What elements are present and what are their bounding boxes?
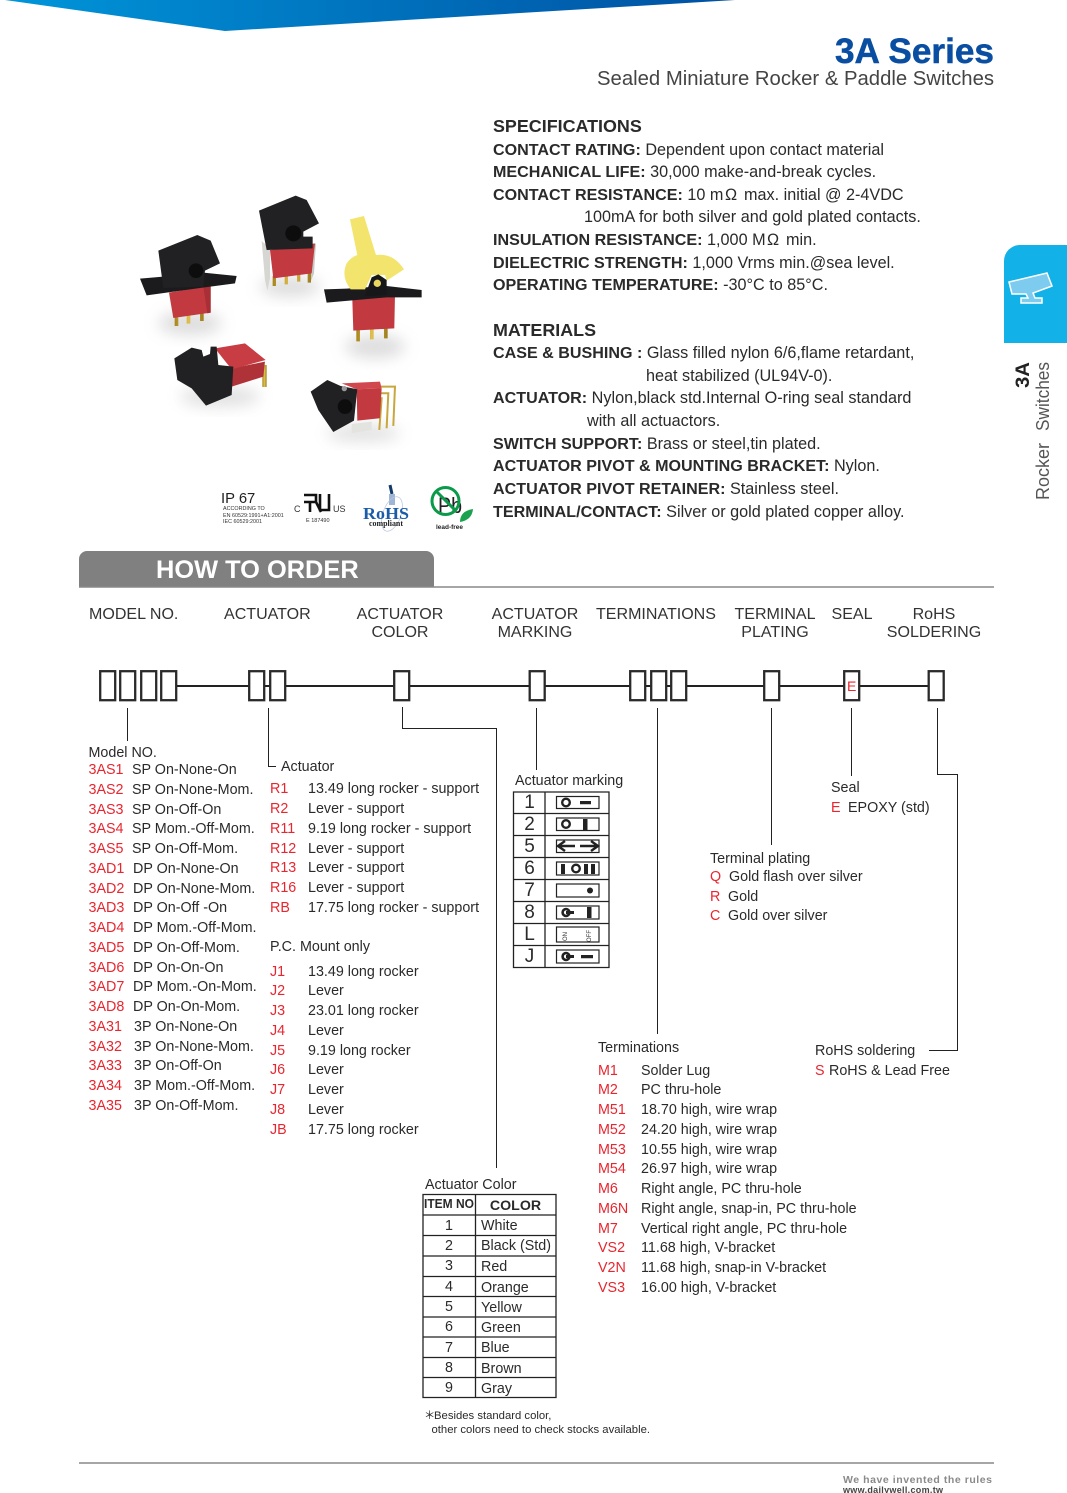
model number list: 3AD7 [88, 979, 124, 995]
rohs soldering: RoHS & Lead Free [829, 1063, 950, 1079]
footnote: Besides standard color, [434, 1410, 551, 1422]
model number list: SP On-None-On [132, 762, 237, 778]
terminal plating: Gold over silver [728, 908, 828, 924]
actuator color table: ITEM NO [424, 1197, 474, 1211]
materials: MATERIALS [493, 320, 596, 340]
terminations: 16.00 high, V-bracket [641, 1280, 776, 1296]
materials: with all actuactors. [586, 412, 720, 430]
actuator marking table: ON [563, 932, 569, 941]
terminations: M54 [598, 1161, 626, 1177]
actuator marking table: 6 [524, 858, 535, 879]
logo: IP 67: ACCORDING TO [223, 506, 265, 512]
switch 3 yellow paddle [324, 216, 422, 341]
footnote: other colors need to check stocks available. [432, 1424, 650, 1436]
actuator marking table: L [524, 924, 535, 945]
product photo: five switches [140, 196, 422, 442]
seal: Seal [831, 780, 860, 796]
logo: IP 67 [221, 491, 284, 525]
logo: IP 67: IP 67 [221, 491, 255, 507]
rohs soldering: S [815, 1063, 825, 1079]
terminations: V2N [598, 1260, 626, 1276]
terminations: Vertical right angle, PC thru-hole [641, 1221, 847, 1237]
actuator list: RB [270, 900, 290, 916]
terminations: M51 [598, 1102, 626, 1118]
model number list: 3AS3 [88, 802, 124, 818]
materials: ACTUATOR: Nylon,black std.Internal O-ring seal standard [493, 389, 911, 407]
actuator list: Lever [308, 983, 344, 999]
rohs soldering [815, 1043, 950, 1079]
materials: CASE & BUSHING : Glass filled nylon 6/6,flame retardant, [493, 344, 914, 362]
model number list: DP On-None-Mom. [133, 881, 255, 897]
actuator list: 17.75 long rocker [308, 1122, 419, 1138]
model number list: 3AD5 [88, 940, 124, 956]
side tab: Switches [1033, 362, 1053, 431]
model number list: 3A32 [88, 1039, 122, 1055]
terminal plating: Gold [728, 889, 758, 905]
actuator list: R13 [270, 860, 296, 876]
logo: lead free: Pb [438, 493, 462, 518]
terminations: PC thru-hole [641, 1082, 721, 1098]
marking icon boxes [556, 796, 599, 963]
actuator list: P.C. Mount only [270, 939, 371, 955]
switch 5 [311, 380, 395, 433]
actuator list: 9.19 long rocker [308, 1043, 411, 1059]
model number list: 3A35 [88, 1098, 122, 1114]
terminations: M52 [598, 1122, 626, 1138]
logo: IP 67: IEC 60529:2001 [223, 519, 262, 525]
column headers: PLATING [741, 623, 809, 641]
actuator list: Actuator [281, 759, 335, 775]
terminations: M7 [598, 1221, 618, 1237]
model number list: 3P On-Off-Mom. [134, 1098, 238, 1114]
model number list: 3AS4 [88, 821, 124, 837]
model number list: SP On-None-Mom. [132, 782, 253, 798]
actuator list: J4 [270, 1023, 285, 1039]
model number list: DP On-Off-Mom. [133, 940, 240, 956]
actuator list: R2 [270, 801, 288, 817]
logo: UL: US [333, 504, 346, 514]
model number list: 3AS2 [88, 782, 124, 798]
actuator color table: 9 [445, 1380, 453, 1396]
specifications: Ω [725, 186, 737, 204]
actuator list: R11 [270, 821, 295, 837]
actuator color table: 7 [445, 1340, 453, 1356]
footer: We have invented the rules [843, 1474, 992, 1486]
actuator color table: 5 [445, 1299, 453, 1315]
actuator list: Lever - support [308, 860, 404, 876]
specifications: max. initial @ 2-4VDC [744, 186, 904, 204]
actuator list: Lever - support [308, 880, 404, 896]
column headers: TERMINAL [734, 605, 816, 623]
materials: TERMINAL/CONTACT: Silver or gold plated copper alloy. [493, 503, 905, 521]
model number list: 3AS1 [88, 762, 124, 778]
seal: E [831, 800, 841, 816]
actuator color table: 4 [445, 1279, 453, 1295]
model number list: SP Mom.-Off-Mom. [132, 821, 255, 837]
footnote: ＊ [424, 1410, 435, 1422]
column headers: MODEL NO. [89, 605, 178, 623]
switch 1 [140, 235, 237, 326]
model number list: DP On-On-Mom. [133, 999, 240, 1015]
part number code boxes [100, 671, 944, 700]
how to order heading: HOW TO ORDER [156, 556, 359, 584]
specifications: min. [786, 231, 817, 249]
terminations: Right angle, PC thru-hole [641, 1181, 802, 1197]
actuator list: J3 [270, 1003, 285, 1019]
actuator list: R12 [270, 841, 296, 857]
actuator marking table: OFF [587, 930, 593, 942]
specifications: OPERATING TEMPERATURE: -30°C to 85°C. [493, 276, 828, 294]
specifications: CONTACT RESISTANCE: 10 m [493, 186, 723, 204]
model number list: 3AD3 [88, 900, 124, 916]
actuator marking table: 2 [524, 814, 535, 835]
actuator color table: 8 [445, 1360, 453, 1376]
icon: rocker switch [1009, 273, 1052, 303]
model number list: DP Mom.-On-Mom. [133, 979, 257, 995]
logo: lead free: lead-free [436, 524, 463, 531]
actuator color table: COLOR [490, 1198, 541, 1214]
actuator list: Lever [308, 1062, 344, 1078]
footnote [424, 1410, 650, 1436]
terminations: M6N [598, 1201, 628, 1217]
terminal plating: Terminal plating [710, 851, 810, 867]
actuator marking table [514, 773, 623, 968]
column headers: MARKING [498, 623, 572, 641]
terminations: VS3 [598, 1280, 625, 1296]
actuator list: R16 [270, 880, 296, 896]
actuator list [270, 759, 479, 1138]
side tab: 3A [1012, 362, 1034, 388]
column headers: ACTUATOR [224, 605, 311, 623]
terminations: 10.55 high, wire wrap [641, 1142, 777, 1158]
model number list: SP On-Off-On [132, 802, 221, 818]
actuator list: 23.01 long rocker [308, 1003, 419, 1019]
specifications: CONTACT RATING: Dependent upon contact material [493, 141, 884, 159]
model number list: Model NO. [88, 745, 157, 761]
model number list: 3AD8 [88, 999, 124, 1015]
actuator list: J5 [270, 1043, 285, 1059]
specifications: INSULATION RESISTANCE: 1,000 M [493, 231, 766, 249]
terminations: 18.70 high, wire wrap [641, 1102, 777, 1118]
specifications: Ω [767, 231, 779, 249]
actuator color table: 6 [445, 1319, 453, 1335]
actuator color table: 3 [445, 1258, 453, 1274]
model number list: 3P On-None-Mom. [134, 1039, 254, 1055]
terminations: M6 [598, 1181, 618, 1197]
specifications: SPECIFICATIONS [493, 116, 642, 136]
logo: RoHS [363, 485, 409, 534]
actuator color table: Red [481, 1259, 507, 1275]
materials [493, 320, 914, 521]
terminal plating: Q [710, 869, 721, 885]
actuator list: R1 [270, 781, 288, 797]
switch 2 [259, 196, 319, 291]
model number list: 3AD4 [88, 920, 124, 936]
logo: RoHS: compliant [369, 519, 403, 528]
model number list [88, 745, 257, 1114]
actuator marking table: J [525, 946, 534, 967]
specifications: 100mA for both silver and gold plated contacts. [584, 208, 921, 226]
actuator marking table: 7 [524, 880, 535, 901]
model number list: 3AD1 [88, 861, 124, 877]
column headers [89, 605, 981, 641]
actuator list: Lever [308, 1023, 344, 1039]
model number list: 3A31 [88, 1019, 122, 1035]
actuator list: Lever - support [308, 801, 404, 817]
actuator color table: 2 [445, 1238, 453, 1254]
terminations: M1 [598, 1063, 618, 1079]
title [597, 32, 994, 90]
actuator marking table: Actuator marking [515, 773, 623, 789]
specifications [493, 116, 921, 294]
actuator color table: Gray [481, 1381, 513, 1397]
terminal plating [710, 851, 863, 924]
actuator marking table: 1 [524, 792, 535, 813]
actuator color table: Yellow [481, 1300, 523, 1316]
actuator color table: Green [481, 1320, 521, 1336]
terminations: Terminations [598, 1040, 679, 1056]
logo: UL [294, 494, 346, 524]
actuator marking table: 8 [524, 902, 535, 923]
model number list: 3A34 [88, 1078, 122, 1094]
column headers: COLOR [371, 623, 429, 641]
model number list: 3P Mom.-Off-Mom. [134, 1078, 255, 1094]
rohs soldering: RoHS soldering [815, 1043, 915, 1059]
actuator color table [423, 1177, 556, 1398]
actuator color table: White [481, 1218, 518, 1234]
actuator marking table: 5 [524, 836, 535, 857]
terminations: Right angle, snap-in, PC thru-hole [641, 1201, 857, 1217]
terminal plating: Gold flash over silver [729, 869, 863, 885]
seal [831, 780, 930, 816]
seal: EPOXY (std) [848, 800, 930, 816]
logo: RoHS: RoHS [363, 504, 409, 523]
actuator list: 13.49 long rocker [308, 964, 419, 980]
terminations [598, 1040, 857, 1296]
actuator color table: Blue [481, 1340, 510, 1356]
certification logos [221, 485, 473, 534]
materials: heat stabilized (UL94V-0). [646, 367, 832, 385]
model number list: DP On-None-On [133, 861, 239, 877]
terminations: 26.97 high, wire wrap [641, 1161, 777, 1177]
actuator list: J8 [270, 1102, 285, 1118]
terminations: 24.20 high, wire wrap [641, 1122, 777, 1138]
header banner [5, 0, 735, 31]
column headers: ACTUATOR [357, 605, 443, 623]
how to order heading [79, 551, 434, 587]
actuator list: J2 [270, 983, 285, 999]
column headers: RoHS [913, 605, 955, 623]
logo: UL: C [294, 504, 301, 514]
actuator list: Lever [308, 1102, 344, 1118]
actuator list: J1 [270, 964, 285, 980]
title: 3A Series [835, 32, 994, 71]
title: Sealed Miniature Rocker & Paddle Switches [597, 68, 994, 90]
footer [842, 1474, 992, 1493]
specifications: DIELECTRIC STRENGTH: 1,000 Vrms min.@sea level. [493, 254, 895, 272]
materials: ACTUATOR PIVOT & MOUNTING BRACKET: Nylon. [493, 457, 880, 475]
logo: lead free [432, 488, 473, 531]
actuator list: 13.49 long rocker - support [308, 781, 479, 797]
actuator color table: Orange [481, 1280, 529, 1296]
actuator color table: Brown [481, 1361, 522, 1377]
logo: IP 67: EN 60529:1991+A1:2001 [223, 513, 284, 519]
actuator list: JB [270, 1122, 287, 1138]
model number list: DP On-On-On [133, 960, 223, 976]
actuator list: J6 [270, 1062, 285, 1078]
terminations: M53 [598, 1142, 626, 1158]
specifications: MECHANICAL LIFE: 30,000 make-and-break cycles. [493, 163, 876, 181]
terminal plating: C [710, 908, 720, 924]
side tab: Rocker [1033, 443, 1053, 500]
actuator list: Lever - support [308, 841, 404, 857]
terminations: VS2 [598, 1240, 625, 1256]
model number list: 3P On-None-On [134, 1019, 237, 1035]
materials: SWITCH SUPPORT: Brass or steel,tin plated. [493, 435, 821, 453]
model number list: 3AD6 [88, 960, 124, 976]
model number list: DP Mom.-Off-Mom. [133, 920, 257, 936]
actuator list: 17.75 long rocker - support [308, 900, 479, 916]
terminal plating: R [710, 889, 720, 905]
model number list: DP On-Off -On [133, 900, 227, 916]
column headers: TERMINATIONS [596, 605, 716, 623]
column headers: ACTUATOR [492, 605, 578, 623]
actuator list: J7 [270, 1082, 285, 1098]
actuator color table: Actuator Color [425, 1177, 517, 1193]
actuator list: 9.19 long rocker - support [308, 821, 471, 837]
model number list: 3P On-Off-On [134, 1058, 222, 1074]
actuator color table: Black (Std) [481, 1238, 551, 1254]
model number list: 3A33 [88, 1058, 122, 1074]
terminations: 11.68 high, V-bracket [641, 1240, 775, 1256]
column headers: SOLDERING [887, 623, 981, 641]
model number list: 3AS5 [88, 841, 124, 857]
terminations: Solder Lug [641, 1063, 710, 1079]
model number list: 3AD2 [88, 881, 124, 897]
part number code boxes: E [847, 678, 856, 694]
actuator list: Lever [308, 1082, 344, 1098]
model number list: SP On-Off-Mom. [132, 841, 238, 857]
switch 4 [174, 343, 267, 406]
terminations: M2 [598, 1082, 618, 1098]
materials: ACTUATOR PIVOT RETAINER: Stainless steel. [493, 480, 839, 498]
connector lines [128, 707, 958, 1168]
column headers: SEAL [832, 605, 873, 623]
logo: UL: E 187490 [306, 518, 330, 524]
side tab [1004, 245, 1067, 500]
actuator color table: 1 [445, 1218, 453, 1234]
terminations: 11.68 high, snap-in V-bracket [641, 1260, 826, 1276]
